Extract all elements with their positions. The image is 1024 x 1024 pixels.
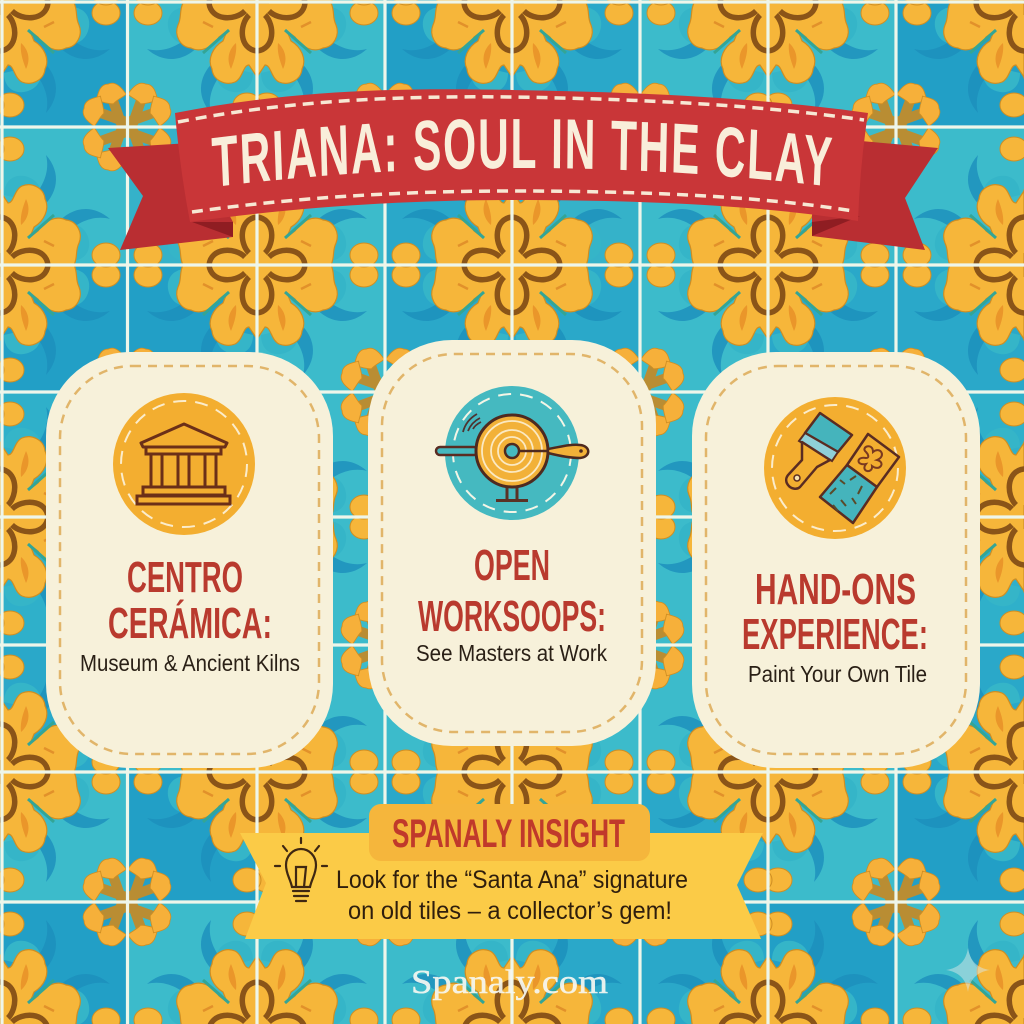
- callout body text: [336, 866, 688, 925]
- title ribbon: [108, 89, 938, 250]
- ribbon main band: [175, 89, 868, 222]
- ribbon right tail: [812, 140, 938, 250]
- panel: Centro Cerámica: [46, 352, 333, 768]
- heading: Open Worksoops: [418, 541, 606, 641]
- caption: Paint Your Own Tile: Paint Your Own Tile: [748, 661, 927, 687]
- callout tag: [369, 804, 650, 861]
- heading: Centro Cerámica: CERÁMICA:: [108, 598, 272, 648]
- caption: Museum & Ancient Kilns: Museum & Ancient Kilns: [80, 650, 300, 676]
- icon: museum temple: [113, 393, 255, 535]
- callout body text: Look for the “Santa Ana” signature: [336, 866, 688, 894]
- panel: Hand-ons Experience: [692, 352, 980, 768]
- icon: light bulb: [275, 838, 327, 901]
- heading: Hand-ons Experience: [742, 565, 928, 659]
- heading: Centro Cerámica: [108, 553, 272, 648]
- icon: sparkle watermark: [946, 948, 990, 992]
- heading: Open Worksoops: OPEN: [474, 541, 550, 590]
- ribbon left tail: [108, 143, 233, 250]
- heading: Centro Cerámica: CENTRO: [127, 553, 243, 602]
- callout heading: SPANALY INSIGHT: [392, 812, 625, 856]
- heading: Open Worksoops: WORKSOOPS:: [418, 592, 606, 641]
- panel: Open Workshops: [368, 340, 656, 746]
- insight callout banner: [240, 804, 763, 939]
- callout body text: on old tiles – a collector’s gem!: [348, 897, 672, 925]
- site credit: Spanaly.com: [411, 964, 608, 1001]
- icon: potter's wheel: [436, 386, 588, 520]
- icon: paint brush and tile: [764, 397, 906, 539]
- heading: Hand-ons Experience: HAND-ONS: [755, 565, 916, 614]
- title text: TRIANA: SOUL IN THE CLAY: [212, 119, 832, 186]
- caption: See Masters at Work: See Masters at Work: [416, 640, 607, 666]
